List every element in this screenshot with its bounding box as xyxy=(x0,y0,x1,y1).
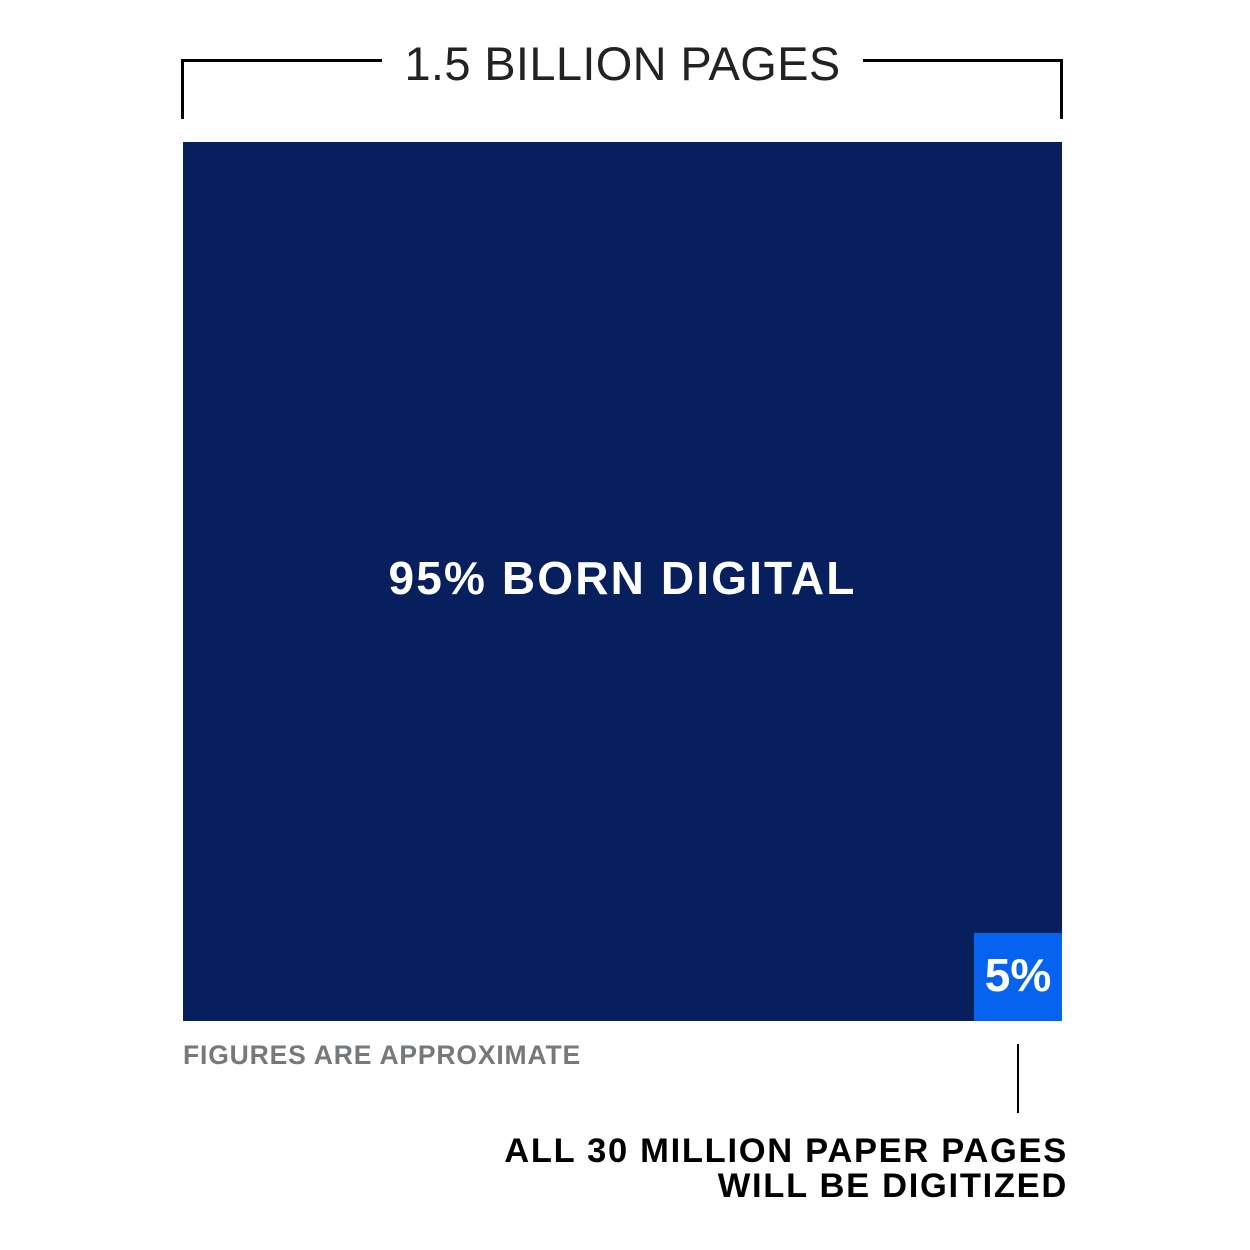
callout: paper pages: WILL BE DIGITIZED xyxy=(718,1167,1068,1205)
panel: 5% square xyxy=(974,933,1062,1021)
panel: 5% square: 5% xyxy=(985,949,1051,1001)
note: figures are approximate: FIGURES ARE APPROXIMATE xyxy=(183,1040,581,1070)
leader line to callout xyxy=(1017,1044,1019,1113)
callout: paper pages xyxy=(504,1132,1068,1205)
bracket: total width xyxy=(181,59,1063,119)
title: total pages: 1.5 BILLION PAGES xyxy=(404,37,841,90)
panel: 95% born digital square xyxy=(183,142,1062,1021)
callout: paper pages: ALL 30 MILLION PAPER PAGES xyxy=(504,1132,1068,1170)
label: 95% born digital: 95% BORN DIGITAL xyxy=(388,552,857,604)
